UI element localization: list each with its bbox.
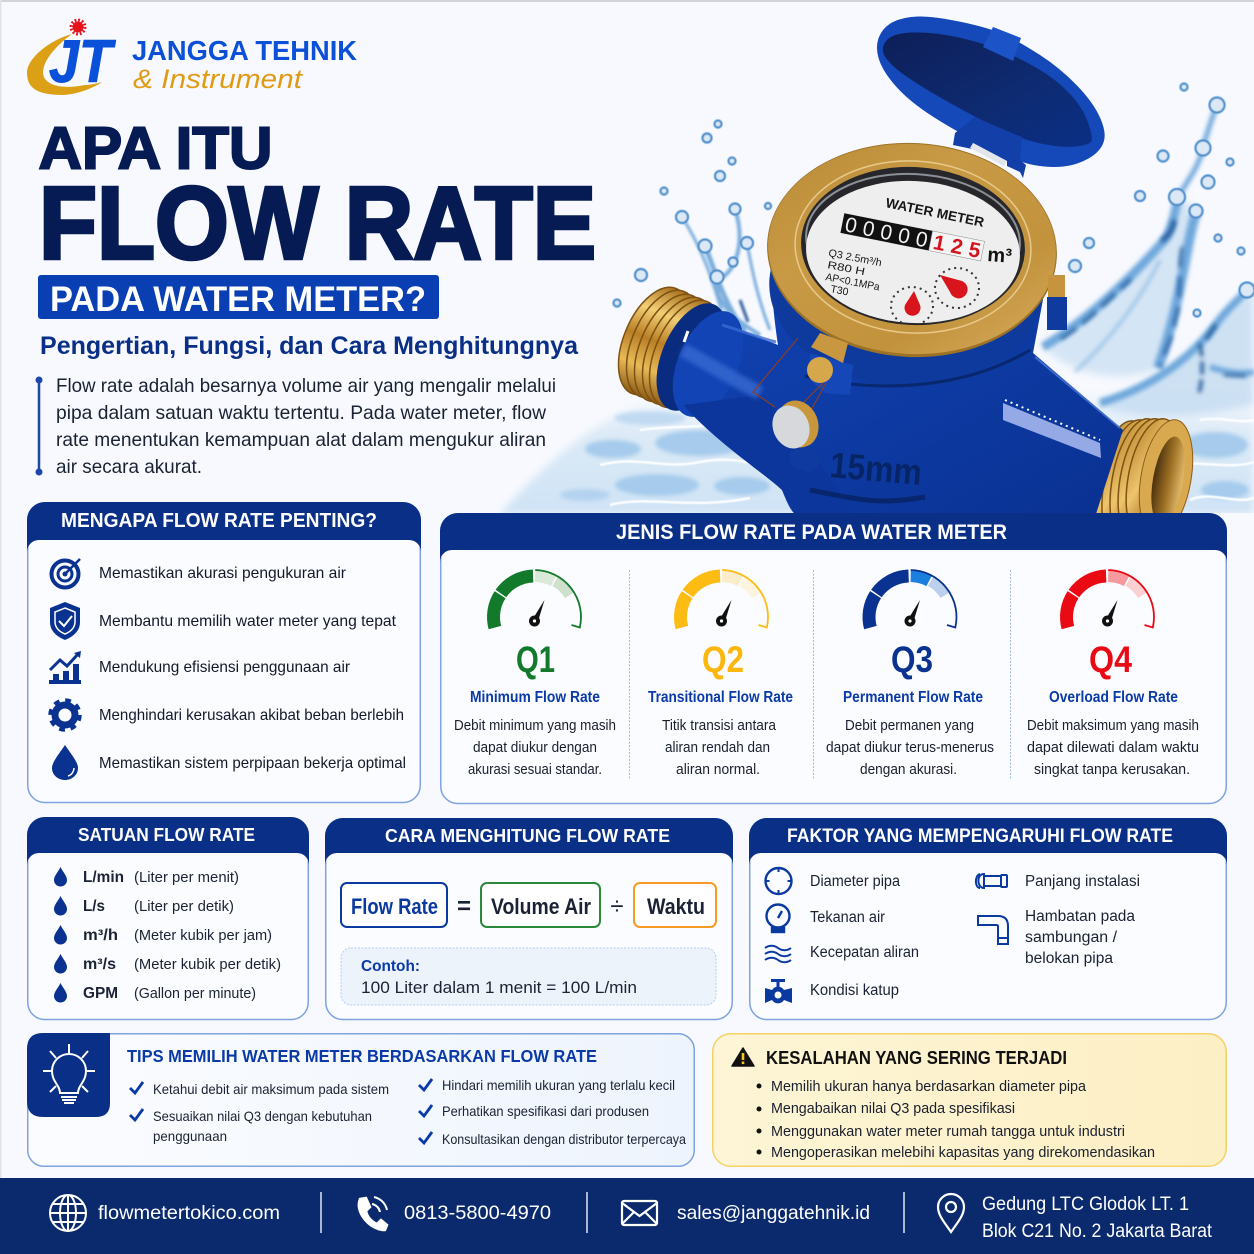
tips text: Perhatikan spesifikasi dari produsen	[442, 1103, 649, 1119]
column Q3: dapat diukur terus-menerus	[826, 740, 994, 756]
list items: Membantu memilih water meter yang tepat	[99, 613, 397, 630]
tips text: Ketahui debit air maksimum pada sistem	[153, 1081, 389, 1097]
icon: light bulb	[27, 1033, 110, 1117]
heading: KESALAHAN YANG SERING TERJADI	[766, 1048, 1067, 1068]
unit descriptions: (Liter per menit)	[134, 870, 239, 886]
column Q2: aliran normal.	[676, 762, 760, 778]
counter: 0	[861, 217, 877, 242]
factor labels: Kondisi katup	[810, 982, 899, 999]
icon: elbow pipe	[978, 916, 1008, 944]
example box	[341, 948, 716, 1005]
tips text	[153, 1077, 686, 1147]
column Q3: Debit permanen yang	[845, 718, 974, 734]
formula: Flow Rate	[351, 894, 438, 919]
intro paragraph	[36, 375, 556, 478]
panel: tips	[27, 1033, 694, 1166]
formula: ÷	[610, 893, 624, 920]
brass ring and dial: R80 H	[826, 259, 866, 278]
counter: 0	[878, 220, 894, 245]
column Q4: dapat dilewati dalam waktu	[1027, 740, 1199, 756]
column Q4	[1027, 570, 1199, 778]
panel: jenis flow rate	[440, 513, 1227, 804]
counter: 0	[914, 228, 930, 252]
droplets	[614, 84, 1254, 316]
brass ring and dial: AP<0.1MPa	[824, 271, 881, 293]
intro paragraph: pipa dalam satuan waktu tertentu. Pada water meter, flow	[56, 402, 547, 424]
unit descriptions: (Liter per detik)	[134, 899, 234, 915]
units: L/s	[83, 898, 105, 915]
icon: pressure gauge	[766, 904, 790, 932]
intro paragraph: air secara akurat.	[56, 456, 202, 478]
column Q3	[826, 570, 994, 778]
left threaded connector	[618, 286, 712, 408]
mistakes text: Memilih ukuran hanya berdasarkan diameter pipa	[771, 1078, 1087, 1095]
example box: Contoh:	[361, 958, 420, 975]
unit descriptions: (Gallon per minute)	[134, 986, 256, 1002]
logo: JT	[49, 28, 116, 95]
bullets	[756, 1084, 762, 1154]
formula: Waktu	[647, 894, 705, 919]
column Q3: Q3	[891, 639, 933, 680]
splash right	[1043, 105, 1254, 416]
list items: Memastikan sistem perpipaan bekerja optimal	[99, 755, 406, 772]
drum	[769, 270, 902, 380]
formula	[341, 883, 716, 927]
mistakes text: Mengabaikan nilai Q3 pada spesifikasi	[771, 1100, 1015, 1117]
example box: 100 Liter dalam 1 menit = 100 L/min	[361, 978, 637, 997]
splash left	[682, 209, 770, 335]
lid tab	[983, 27, 1021, 61]
factor labels: sambungan /	[1025, 929, 1118, 946]
small dials	[935, 268, 979, 308]
panel: kesalahan	[713, 1034, 1226, 1166]
mistakes text: Mengoperasikan melebihi kapasitas yang direkomendasikan	[771, 1144, 1155, 1161]
list items	[99, 565, 406, 772]
factor labels: Kecepatan aliran	[810, 944, 919, 961]
heading: TIPS MEMILIH WATER METER BERDASARKAN FLOW RATE	[127, 1046, 597, 1066]
column Q4: singkat tanpa kerusakan.	[1034, 762, 1190, 778]
list items: Memastikan akurasi pengukuran air	[99, 565, 347, 582]
formula: Volume Air	[491, 894, 591, 919]
column Q4: Debit maksimum yang masih	[1027, 718, 1199, 734]
subtitle: Pengertian, Fungsi, dan Cara Menghitungnya	[40, 332, 579, 360]
column Q1	[454, 570, 616, 778]
tips text: Konsultasikan dengan distributor terpercaya	[442, 1131, 686, 1147]
icon: location pin	[938, 1194, 964, 1232]
icon: waves	[765, 946, 791, 962]
logo	[27, 20, 357, 95]
column Q2: Titik transisi antara	[662, 718, 777, 734]
right threaded connector	[1096, 418, 1194, 513]
icon: warning	[732, 1048, 754, 1066]
icon: long pipe	[976, 874, 1007, 888]
heading: FAKTOR YANG MEMPENGARUHI FLOW RATE	[787, 826, 1173, 847]
mistakes text	[771, 1078, 1155, 1161]
brass ring and dial: Q3 2.5m³/h	[827, 247, 883, 269]
phone number: 0813-5800-4970	[404, 1203, 551, 1224]
factor labels: Tekanan air	[810, 909, 885, 926]
factor labels: Hambatan pada	[1025, 908, 1135, 925]
column Q1: Debit minimum yang masih	[454, 718, 616, 734]
icon: gear	[50, 700, 80, 730]
column Q2: aliran rendah dan	[665, 740, 770, 756]
embossed size label: 15mm	[828, 444, 924, 493]
footer bar	[0, 1178, 1254, 1254]
tips text: penggunaan	[153, 1128, 227, 1144]
intro paragraph: Flow rate adalah besarnya volume air yang mengalir melalui	[56, 375, 556, 397]
column Q4: Overload Flow Rate	[1049, 689, 1178, 706]
units: L/min	[83, 869, 124, 886]
drops	[54, 867, 67, 1002]
units	[83, 869, 124, 1002]
panel: mengapa flow rate penting	[27, 502, 421, 802]
column Q2	[648, 570, 793, 778]
meter dial text: WATER METER	[884, 195, 986, 230]
column Q3: dengan akurasi.	[860, 762, 957, 778]
panel: cara menghitung	[325, 818, 733, 1020]
counter: 2	[949, 235, 965, 259]
logo: JANGGA TEHNIK	[132, 35, 357, 66]
counter: 1	[931, 231, 948, 256]
hero illustration: water meter with splash	[500, 16, 1254, 556]
icon: pipe diameter	[766, 868, 792, 894]
icon: chart	[49, 651, 81, 684]
logo: & Instrument	[133, 64, 304, 94]
brass ring and dial: T30	[829, 283, 850, 298]
address: Blok C21 No. 2 Jakarta Barat	[982, 1221, 1213, 1242]
gauge Q1	[494, 570, 581, 628]
factor labels	[810, 873, 1140, 999]
column Q4: Q4	[1089, 639, 1132, 680]
unit descriptions	[134, 870, 281, 1002]
meter body casting	[656, 268, 1123, 513]
pipe flange	[656, 303, 722, 411]
address	[982, 1194, 1213, 1242]
tips text: Sesuaikan nilai Q3 dengan kebutuhan	[153, 1108, 372, 1124]
units: m³/h	[83, 927, 118, 944]
icon: shield	[50, 602, 80, 640]
column Q1: akurasi sesuai standar.	[468, 762, 602, 778]
intro paragraph: rate menentukan kemampuan alat dalam mengukur aliran	[56, 429, 546, 451]
title: APA ITU	[38, 116, 272, 182]
icon: target	[52, 559, 80, 588]
counter: 0	[896, 224, 912, 249]
address: Gedung LTC Glodok LT. 1	[982, 1194, 1189, 1215]
column Q2: Transitional Flow Rate	[648, 689, 793, 706]
meter lid	[877, 16, 1105, 178]
column Q1: Minimum Flow Rate	[470, 689, 600, 706]
counter	[840, 213, 985, 263]
title: FLOW RATE	[39, 166, 596, 280]
mistakes text: Menggunakan water meter rumah tangga untuk industri	[771, 1123, 1125, 1140]
factor labels: Panjang instalasi	[1025, 873, 1140, 890]
water pool	[501, 406, 1254, 513]
icon: globe	[50, 1195, 86, 1231]
counter: 0	[843, 213, 859, 238]
heading: CARA MENGHITUNG FLOW RATE	[385, 825, 670, 846]
heading: MENGAPA FLOW RATE PENTING?	[61, 510, 377, 532]
factor labels: belokan pipa	[1025, 950, 1113, 967]
column Q2: Q2	[702, 639, 744, 680]
counter: 5	[967, 238, 983, 263]
unit descriptions: (Meter kubik per detik)	[134, 957, 281, 973]
panel: satuan flow rate	[27, 817, 309, 1020]
heading: SATUAN FLOW RATE	[78, 824, 255, 845]
seal and brackets	[752, 275, 1067, 448]
brass ring and dial	[762, 136, 1062, 364]
website: flowmetertokico.com	[98, 1203, 280, 1224]
column Q3: Permanent Flow Rate	[843, 689, 983, 706]
gauge Q3	[869, 570, 956, 628]
highlights	[683, 350, 760, 393]
column Q1: Q1	[516, 639, 555, 680]
title	[38, 116, 596, 280]
heading: JENIS FLOW RATE PADA WATER METER	[616, 521, 1007, 544]
brass ring and dial: m³	[987, 244, 1013, 268]
units: GPM	[83, 985, 118, 1002]
list items: Menghindari kerusakan akibat beban berlebih	[99, 707, 404, 724]
icon: drop	[52, 745, 78, 780]
formula: =	[457, 893, 471, 920]
title highlight pill: PADA WATER METER?	[50, 280, 426, 319]
panel: faktor	[749, 818, 1227, 1020]
gauge Q4	[1067, 570, 1154, 628]
factor labels: Diameter pipa	[810, 873, 900, 890]
icon: valve	[765, 979, 792, 1003]
list items: Mendukung efisiensi penggunaan air	[99, 659, 351, 676]
unit descriptions: (Meter kubik per jam)	[134, 928, 272, 944]
tips text: Hindari memilih ukuran yang terlalu kecil	[442, 1077, 675, 1093]
gauge Q2	[681, 570, 768, 628]
icon: envelope	[622, 1201, 657, 1225]
email: sales@janggatehnik.id	[677, 1203, 870, 1224]
icon: phone	[359, 1197, 387, 1230]
check marks	[130, 1079, 432, 1143]
column Q1: dapat diukur dengan	[473, 740, 597, 756]
lid hinge	[953, 117, 1026, 178]
units: m³/s	[83, 956, 116, 973]
